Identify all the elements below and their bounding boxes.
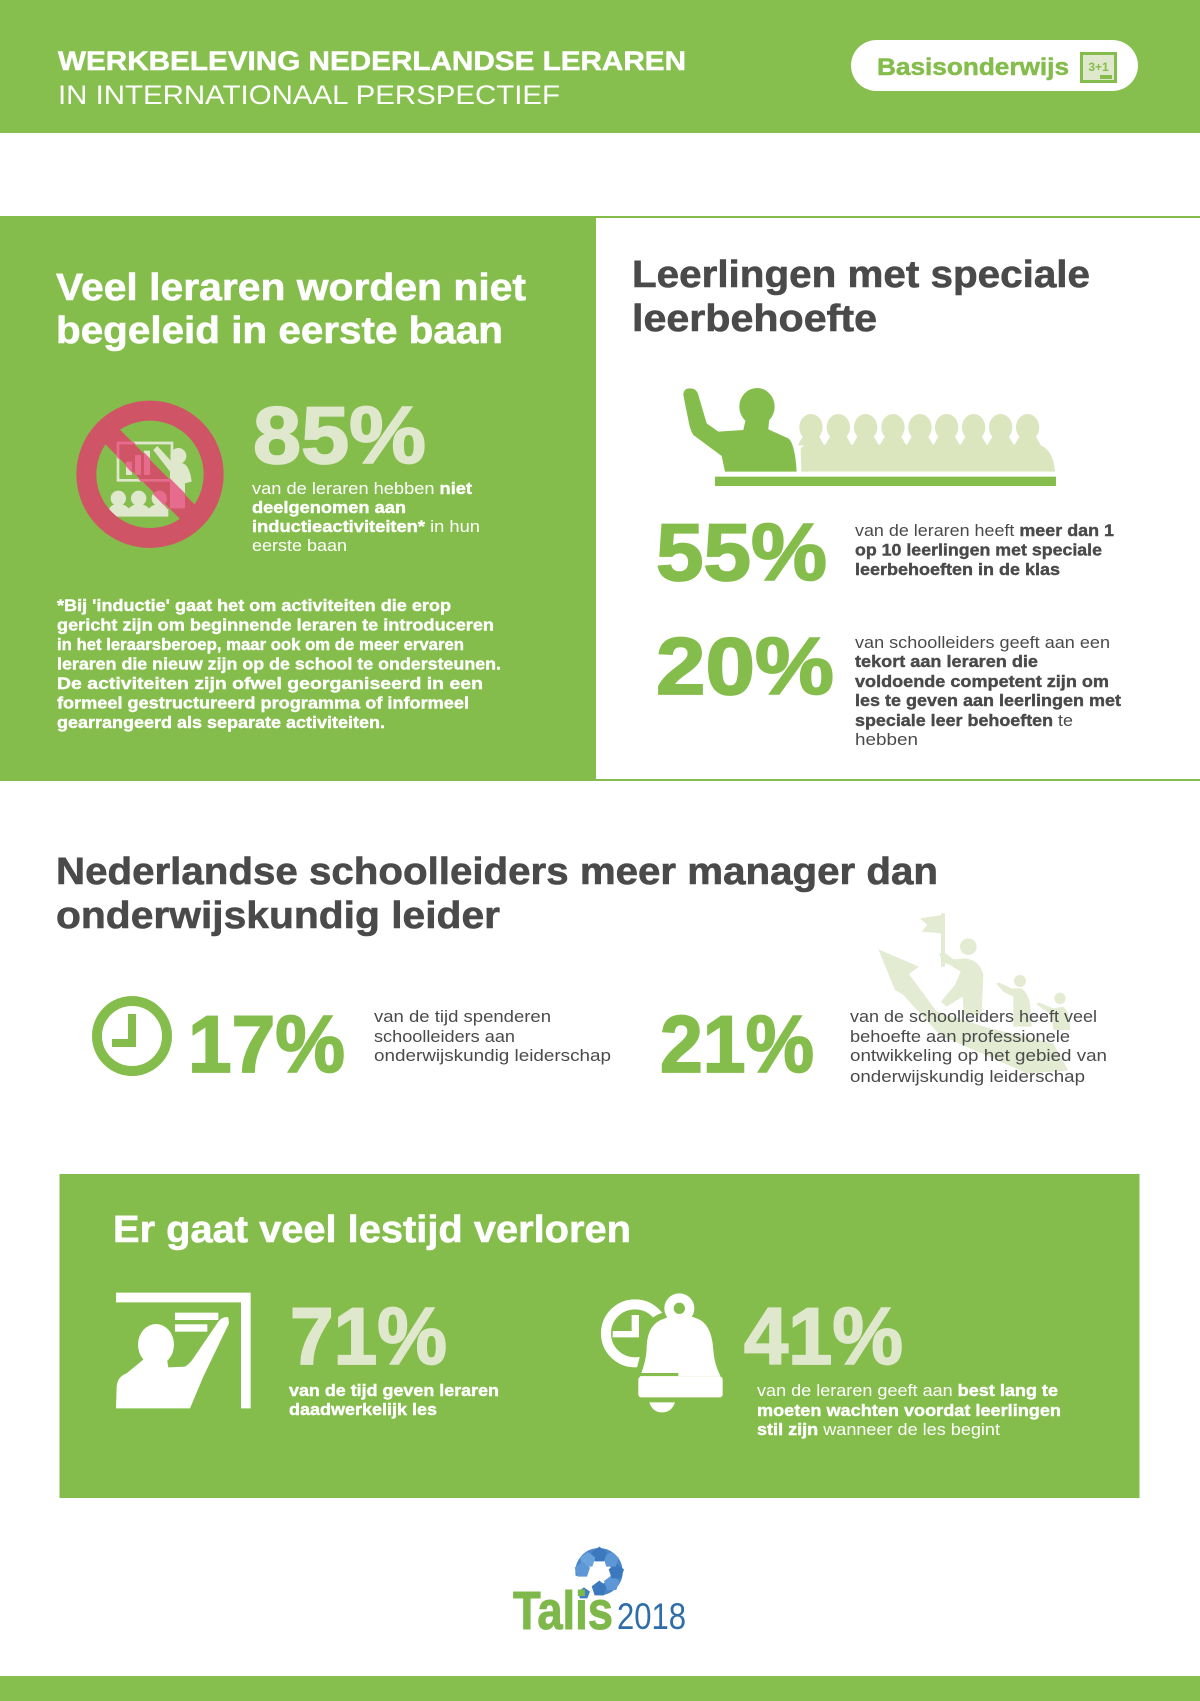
footnote: inductie: *Bij 'inductie' gaat het om activiteiten die erop: [57, 596, 451, 615]
title: WERKBELEVING NEDERLANDSE LERAREN: [58, 46, 686, 76]
text: tekort aan leraren: speciale leer behoeften te: [855, 711, 1073, 730]
text: niet deelgenomen: deelgenomen aan: [252, 498, 406, 517]
heading: leerlingen: leerbehoefte: [632, 298, 877, 340]
text: tekort aan leraren: voldoende competent zijn om: [855, 672, 1109, 691]
text: stil zijn: van de leraren geeft aan best lang te: [757, 1381, 1058, 1400]
text: behoefte ontwikkeling: ontwikkeling op het gebied van: [850, 1046, 1107, 1065]
footer band: [0, 1676, 1200, 1701]
heading: leerlingen: [632, 254, 1090, 340]
text: behoefte ontwikkeling: van de schoolleiders heeft veel: [850, 1007, 1097, 1026]
panel: begeleiding in eerste baan: [0, 216, 596, 781]
heading: veel leraren: [56, 267, 526, 352]
logo: Talis 2018: 2018: [617, 1596, 686, 1637]
stat: 71%: 71%: [290, 1292, 447, 1382]
logo: Talis 2018: [513, 1547, 686, 1641]
heading: schoolleiders: onderwijskundig leider: [56, 895, 500, 937]
text: meer dan 1 op 10: leerbehoeften in de klas: [855, 560, 1060, 579]
heading: schoolleiders: Nederlandse schoolleiders meer manager dan: [56, 851, 938, 893]
heading: veel leraren: Veel leraren worden niet: [56, 267, 526, 309]
text: stil zijn: [757, 1381, 1061, 1439]
badge: Basisonderwijs: Basisonderwijs: [877, 54, 1069, 81]
stat: 17%: 17%: [188, 1000, 345, 1090]
text: stil zijn: moeten wachten voordat leerlingen: [757, 1401, 1061, 1420]
text: tekort aan leraren: [855, 633, 1121, 749]
text: daadwerkelijk les: van de tijd geven leraren: [289, 1381, 499, 1400]
text: daadwerkelijk les: [289, 1381, 499, 1419]
panel: speciale leerbehoefte: [596, 216, 1200, 781]
footnote: inductie: [57, 596, 501, 732]
heading: lestijd: Er gaat veel lestijd verloren: [113, 1209, 631, 1251]
heading: schoolleiders: [56, 851, 938, 937]
heading: leerlingen: Leerlingen met speciale: [632, 254, 1090, 296]
text: behoefte ontwikkeling: [850, 1007, 1107, 1086]
icon: clock: [97, 1001, 167, 1071]
header band: [0, 0, 1200, 133]
text: niet deelgenomen: eerste baan: [252, 536, 347, 555]
badge: Basisonderwijs: 3+1: [1088, 60, 1109, 74]
icon: no induction: [86, 411, 214, 538]
footnote: inductie: gericht zijn om beginnende leraren te introduceren: [57, 616, 494, 634]
footnote: inductie: in het leraarsberoep, maar ook om de meer ervaren: [57, 635, 464, 654]
footnote: inductie: De activiteiten zijn ofwel georganiseerd in een: [57, 674, 483, 693]
text: niet deelgenomen: [252, 479, 480, 555]
icon: teacher at board: [116, 1293, 251, 1408]
text: tijd leiderschap: [374, 1007, 611, 1065]
stat: 85%: 85%: [253, 391, 426, 481]
stat: 21%: 21%: [660, 1000, 814, 1090]
section: schoolleiders: [56, 851, 1107, 1090]
footnote: inductie: leraren die nieuw zijn op de school te ondersteunen.: [57, 654, 501, 674]
title: IN INTERNATIONAAL PERSPECTIEF: [58, 80, 560, 110]
text: tekort aan leraren: tekort aan leraren die: [855, 652, 1038, 671]
footnote: inductie: gearrangeerd als separate activiteiten.: [57, 713, 385, 732]
badge: Basisonderwijs: [851, 40, 1138, 91]
stat: 20%: 20%: [656, 622, 834, 712]
text: behoefte ontwikkeling: behoefte aan professionele: [850, 1027, 1070, 1046]
logo: Talis 2018: Talis: [513, 1581, 613, 1641]
heading: veel leraren: begeleid in eerste baan: [56, 310, 503, 352]
footnote: inductie: formeel gestructureerd programma of informeel: [57, 694, 469, 712]
text: tekort aan leraren: les te geven aan leerlingen met: [855, 691, 1121, 710]
text: tekort aan leraren: hebben: [855, 730, 918, 749]
text: tijd leiderschap: van de tijd spenderen: [374, 1007, 551, 1026]
text: stil zijn: stil zijn wanneer de les begint: [757, 1420, 1000, 1439]
text: niet deelgenomen: inductieactiviteiten* in hun: [252, 517, 480, 536]
icon: classroom with raised hand: [683, 388, 1056, 486]
text: tijd leiderschap: schoolleiders aan: [374, 1027, 515, 1046]
icon: clock and bell: [606, 1298, 723, 1412]
text: daadwerkelijk les: daadwerkelijk les: [289, 1400, 437, 1419]
text: meer dan 1 op 10: van de leraren heeft meer dan 1: [855, 521, 1114, 540]
text: meer dan 1 op 10: [855, 521, 1114, 579]
panel: lestijd: [60, 1174, 1140, 1498]
text: behoefte ontwikkeling: onderwijskundig leiderschap: [850, 1067, 1085, 1086]
text: tijd leiderschap: onderwijskundig leiderschap: [374, 1046, 611, 1065]
stat: 55%: 55%: [656, 508, 827, 598]
text: tekort aan leraren: van schoolleiders geeft aan een: [855, 633, 1110, 652]
icon: leader with flag: [878, 913, 1070, 1073]
text: meer dan 1 op 10: op 10 leerlingen met speciale: [855, 540, 1102, 560]
text: niet deelgenomen: van de leraren hebben niet: [252, 479, 472, 498]
title: [58, 46, 686, 110]
stat: 41%: 41%: [744, 1292, 903, 1382]
